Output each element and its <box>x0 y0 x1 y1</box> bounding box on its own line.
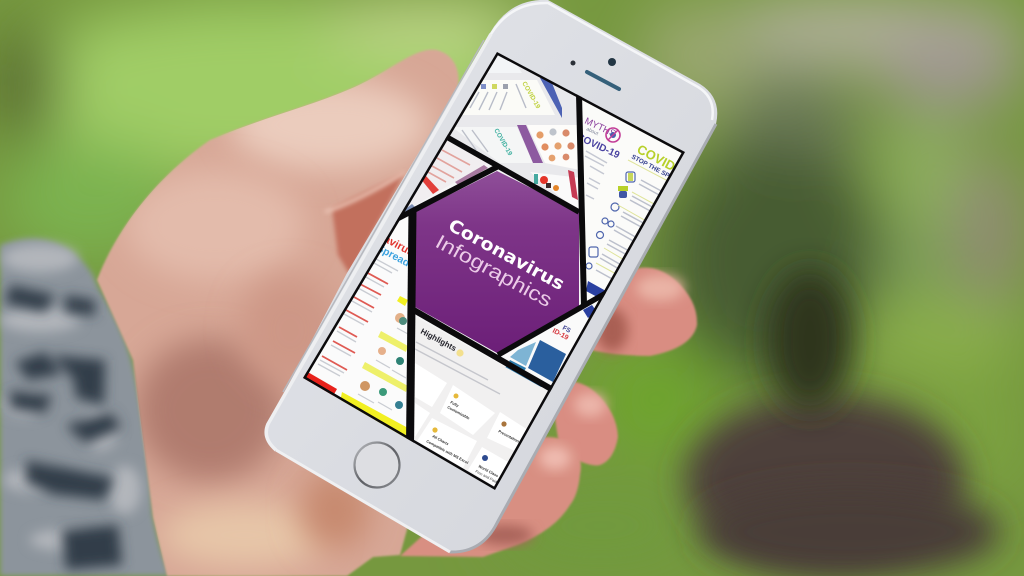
infographic tile: covid-19 teal: COVID-19 <box>492 128 514 157</box>
card labels: Fully <box>450 400 460 408</box>
infographic tile: symptom icons <box>527 125 580 170</box>
heading: COVID-19 stop the spread: STOP THE SPREAD <box>630 154 687 188</box>
card labels <box>426 400 520 484</box>
panel: small blue tiles: ID-19 <box>551 328 570 342</box>
infographic tile: red icons <box>530 170 578 208</box>
finger: index <box>590 268 697 356</box>
sensor <box>570 60 576 66</box>
yellow band: bottom <box>340 392 408 440</box>
panel: small blue tiles <box>506 305 596 388</box>
sweater cuff <box>0 239 170 576</box>
card labels: Presentation <box>498 429 520 444</box>
description lines <box>415 342 500 394</box>
panel: top collage of infographics <box>450 66 578 202</box>
purple hexagon with title <box>415 171 579 353</box>
phone body <box>265 0 717 552</box>
icon: prohibited virus <box>606 128 620 142</box>
heading: COVID-19 stop the spread <box>632 146 676 178</box>
heading: Highlights: Highlights <box>419 327 458 353</box>
panel: Highlights <box>415 328 542 486</box>
icon: sun <box>456 349 464 357</box>
card labels: All Charts <box>432 434 449 446</box>
panel: small blue tiles: FS <box>561 325 572 335</box>
feature cards <box>415 363 528 488</box>
panel: Myths and Stop the Spread infographics <box>582 118 676 296</box>
red list <box>322 272 388 370</box>
icon list <box>586 160 668 280</box>
heading: COVID-19 stop the spread: COVID-19 <box>635 141 695 183</box>
yellow label: protect yourself <box>362 362 408 392</box>
home button <box>354 442 400 488</box>
panel: small left collage <box>405 149 488 212</box>
heading: coronavirus spreads: avirus <box>382 233 416 259</box>
red footer bar <box>303 371 337 396</box>
heading: myths about COVID-19 <box>582 117 620 158</box>
yellow label: how to protect <box>378 331 408 352</box>
phone screen <box>303 52 695 490</box>
earpiece <box>587 72 619 89</box>
infographic tile: covid-19 spread <box>460 78 562 118</box>
card labels: Customizable <box>447 405 470 420</box>
hand: palm and thumb <box>97 50 470 576</box>
heading: myths about COVID-19: MYTHS <box>583 116 618 140</box>
finger: middle <box>550 381 618 465</box>
finger: ring <box>400 437 581 557</box>
card labels: World Class <box>478 464 499 478</box>
heading: myths about COVID-19: COVID-19 <box>575 132 622 161</box>
front camera <box>608 58 616 66</box>
thumb web shadow <box>332 172 405 275</box>
infographic tile: covid-19 teal <box>452 125 543 163</box>
title: Coronavirus: Coronavirus <box>445 216 568 295</box>
black divider frame <box>393 94 606 445</box>
infographic tile: covid-19 spread: COVID-19 <box>520 80 542 110</box>
blue footer bar <box>586 281 604 296</box>
subtitle: Infographics: Infographics <box>432 231 555 312</box>
small icons <box>360 313 407 409</box>
card labels: Compatible with MS Excel <box>426 439 469 465</box>
card labels: Free and Paid <box>475 469 497 484</box>
heading: coronavirus spreads <box>378 236 408 266</box>
heading: coronavirus spreads: Spreads <box>375 242 417 272</box>
heading: myths about COVID-19: about <box>585 126 600 137</box>
fingers <box>400 268 697 557</box>
panel: left How it spreads infographic <box>303 236 408 440</box>
card icons <box>432 394 507 461</box>
